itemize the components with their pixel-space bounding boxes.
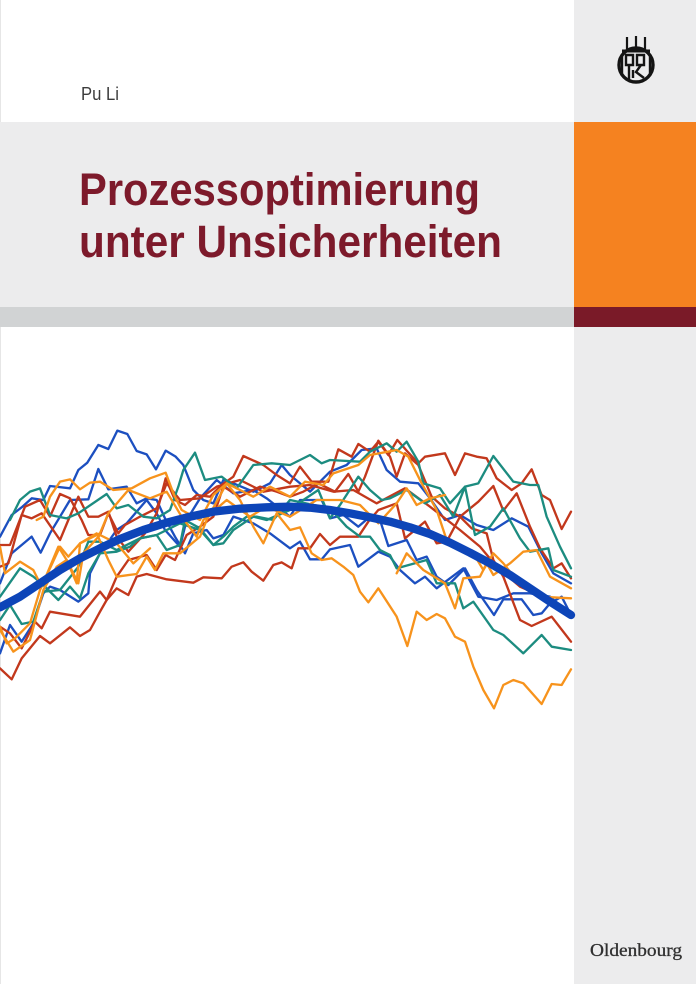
blue scenario lines: [0, 431, 571, 653]
publisher logo: [619, 36, 653, 82]
title: unter Unsicherheiten: [79, 216, 502, 267]
panel: title band: [0, 122, 574, 307]
orange scenario lines: [0, 450, 571, 708]
left edge line: [0, 0, 1, 984]
author name: Pu Li: [81, 83, 119, 104]
line chart: [0, 431, 571, 708]
thick blue mean curve: [0, 507, 571, 615]
panel: dark red block: [574, 307, 696, 327]
publisher name: Oldenbourg: [590, 940, 682, 960]
panel: grey strip: [0, 307, 574, 327]
title: [79, 164, 502, 267]
red scenario lines: [0, 440, 571, 679]
title: Prozessoptimierung: [79, 164, 480, 215]
panel: orange block: [574, 122, 696, 307]
teal scenario lines: [0, 442, 571, 653]
panel: right column: [574, 0, 696, 984]
